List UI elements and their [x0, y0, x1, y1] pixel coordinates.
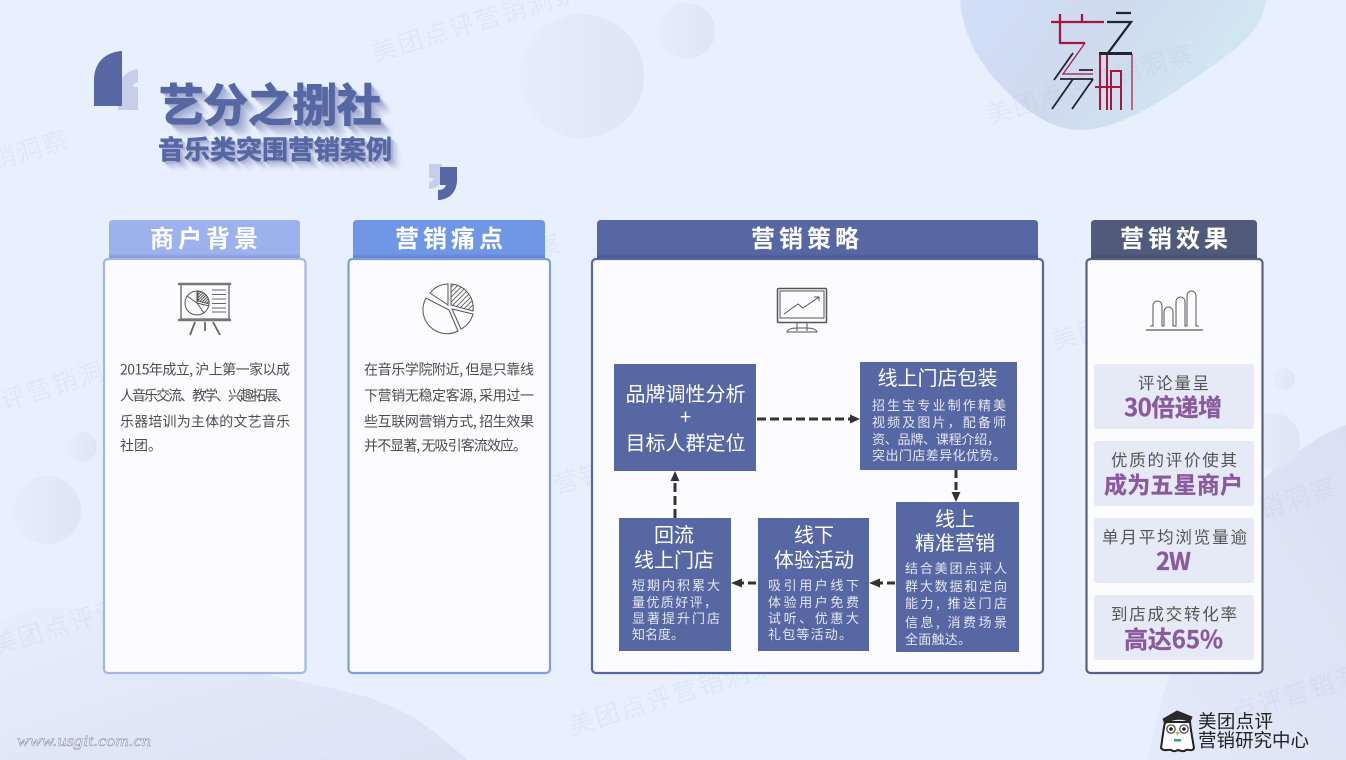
background blob: top right — [960, 0, 1266, 130]
strategy box: 回流线上门店: 回流 — [654, 519, 694, 548]
watermarks: 美团点评营销洞察 — [564, 645, 781, 743]
stat: 2W: 2W — [1156, 542, 1191, 577]
source url: www.usgit.com.cn — [17, 733, 151, 750]
stat: 30倍递增 — [1094, 364, 1254, 429]
strategy box: 品牌调性分析: 目标人群定位 — [626, 427, 746, 456]
text: 商户背景 body: 社团。 — [120, 436, 162, 456]
strategy box: 线上门店包装: 视频及图片，配备师 — [872, 412, 1006, 431]
watermarks: 美团点评营销 — [1047, 276, 1212, 358]
strategy box: 线上精准营销 — [896, 502, 1019, 652]
strategy box: 品牌调性分析: 品牌调性分析 — [626, 378, 746, 407]
icon: monitor — [778, 288, 826, 332]
text: 营销痛点 body — [364, 360, 534, 456]
strategy box: 线下体验活动: 体验活动 — [774, 544, 854, 573]
strategy box: 线下体验活动 — [758, 518, 869, 651]
panel: 营销策略 — [592, 219, 1043, 673]
strategy box: 线上精准营销: 精准营销 — [915, 527, 995, 556]
panel: 商户背景 — [104, 219, 306, 673]
strategy box: 线上门店包装: 资、品牌、课程介绍， — [872, 429, 1000, 448]
strategy box: 回流线上门店: 线上门店 — [634, 544, 714, 573]
strategy box: 回流线上门店: 显著提升门店 — [632, 608, 720, 627]
strategy box: 线上门店包装: 招生宝专业制作精美 — [872, 395, 1006, 414]
strategy box: 品牌调性分析: + — [680, 401, 691, 430]
panel header: 商户背景: 商户背景 — [150, 219, 258, 254]
strategy box: 线上精准营销: 能力, 推送门店 — [905, 593, 1007, 612]
strategy box: 线下体验活动: 体验用户免费 — [768, 592, 859, 611]
strategy box: 品牌调性分析 — [614, 364, 756, 471]
panel header: 商户背景 — [109, 219, 300, 258]
stat: 成为五星商户: 优质的评价使其 — [1111, 447, 1237, 471]
stat: 2W: 单月平均浏览量逾 — [1102, 524, 1247, 548]
strategy box: 回流线上门店: 短期内积累大 — [632, 575, 720, 594]
strategy box: 线上门店包装 — [860, 362, 1017, 470]
strategy box: 线上门店包装: 突出门店差异化优势。 — [872, 445, 1006, 464]
stat: 2W — [1094, 518, 1254, 583]
stat: 高达65%: 高达65% — [1124, 620, 1223, 655]
panel body — [104, 259, 306, 673]
watermarks: 美团点评营销洞察 — [982, 34, 1199, 132]
stat: 30倍递增: 评论量呈 — [1138, 370, 1209, 394]
panel header: 营销痛点: 营销痛点 — [395, 219, 503, 254]
brand text: 美团点评营销研究中心: 营销研究中心 — [1198, 727, 1309, 753]
strategy box: 线下体验活动: 试听、优惠大 — [768, 608, 859, 627]
panel header: 营销效果: 营销效果 — [1120, 219, 1228, 254]
panel: 营销痛点 — [348, 219, 550, 673]
icon: presentation board — [179, 284, 230, 335]
text: 商户背景 body: 人音乐交流、教学、兴趣拓展、 — [120, 386, 290, 406]
icon: pie chart — [423, 284, 473, 334]
text: 商户背景 body: 乐器培训为主体的文艺音乐 — [120, 412, 290, 432]
strategy box: 回流线上门店 — [619, 518, 731, 651]
icon: owl mascot — [1161, 711, 1194, 751]
background blob: bottom left — [0, 607, 467, 760]
subtitle: 音乐类突围营销案例 — [158, 130, 392, 167]
arrow: 回流 to 品牌调性 — [670, 471, 680, 518]
strategy box: 线下体验活动: 礼包等活动。 — [768, 624, 852, 643]
text: 营销痛点 body: 在音乐学院附近, 但是只靠线 — [364, 360, 534, 380]
icon: opening quote mark — [94, 51, 138, 110]
arrow: 品牌调性 to 门店包装 — [757, 414, 860, 424]
strategy box: 线下体验活动: 吸引用户线下 — [768, 575, 859, 594]
strategy box: 线上门店包装: 线上门店包装 — [878, 362, 998, 391]
icon: closing quote mark — [429, 164, 457, 200]
text: 营销痛点 body: 下营销无稳定客源, 采用过一 — [364, 386, 534, 406]
strategy box: 线上精准营销: 线上 — [935, 503, 975, 532]
panel header: 营销效果 — [1091, 219, 1257, 258]
brand text: 美团点评营销研究中心 — [1198, 708, 1309, 753]
text: 营销痛点 body: 些互联网营销方式, 招生效果 — [364, 412, 534, 432]
strategy box: 回流线上门店: 量优质好评， — [632, 592, 717, 611]
stat: 30倍递增: 30倍递增 — [1124, 388, 1222, 423]
panel: 营销效果 — [1086, 219, 1262, 673]
panel body — [592, 259, 1043, 673]
background circles — [13, 3, 1300, 544]
panel body — [348, 259, 550, 673]
icon: bar chart — [1146, 291, 1203, 330]
panel header: 营销策略 — [597, 219, 1038, 258]
logo: 艺分之捌 — [1051, 13, 1132, 110]
strategy box: 线下体验活动: 线下 — [794, 519, 834, 548]
stat: 成为五星商户: 成为五星商户 — [1104, 466, 1243, 500]
strategy box: 线上精准营销: 群大数据和定向 — [905, 576, 1007, 595]
panel body — [1086, 259, 1262, 673]
title: 艺分之捌社 — [159, 69, 382, 134]
panel header: 营销策略: 营销策略 — [751, 219, 859, 254]
panel header: 营销痛点 — [353, 219, 545, 258]
text: 营销痛点 body: 并不显著, 无吸引客流效应。 — [364, 436, 527, 456]
arrow: 精准营销 to 体验活动 — [869, 578, 895, 588]
strategy box: 线上精准营销: 结合美团点评人 — [905, 558, 1007, 577]
strategy box: 回流线上门店: 知名度。 — [632, 624, 684, 643]
stat: 高达65% — [1094, 595, 1254, 660]
watermarks: 评营销洞察 — [1202, 468, 1341, 542]
stat: 成为五星商户 — [1094, 441, 1254, 506]
background blob: bottom right — [1148, 425, 1346, 760]
arrow: 体验活动 to 回流 — [731, 578, 756, 588]
watermarks: 评营销洞察 — [427, 224, 566, 298]
strategy box: 线上精准营销: 信息, 消费场景 — [905, 612, 1007, 631]
arrow: 门店包装 to 精准营销 — [952, 470, 960, 502]
strategy box: 线上精准营销: 全面触达。 — [905, 629, 971, 648]
watermarks: 点评营销 — [497, 452, 611, 518]
text: 商户背景 body — [120, 360, 290, 456]
brand text: 美团点评营销研究中心: 美团点评 — [1198, 708, 1273, 734]
text: 商户背景 body: 2015年成立, 沪上第一家以成 — [120, 360, 290, 380]
stat: 高达65%: 到店成交转化率 — [1111, 601, 1237, 625]
